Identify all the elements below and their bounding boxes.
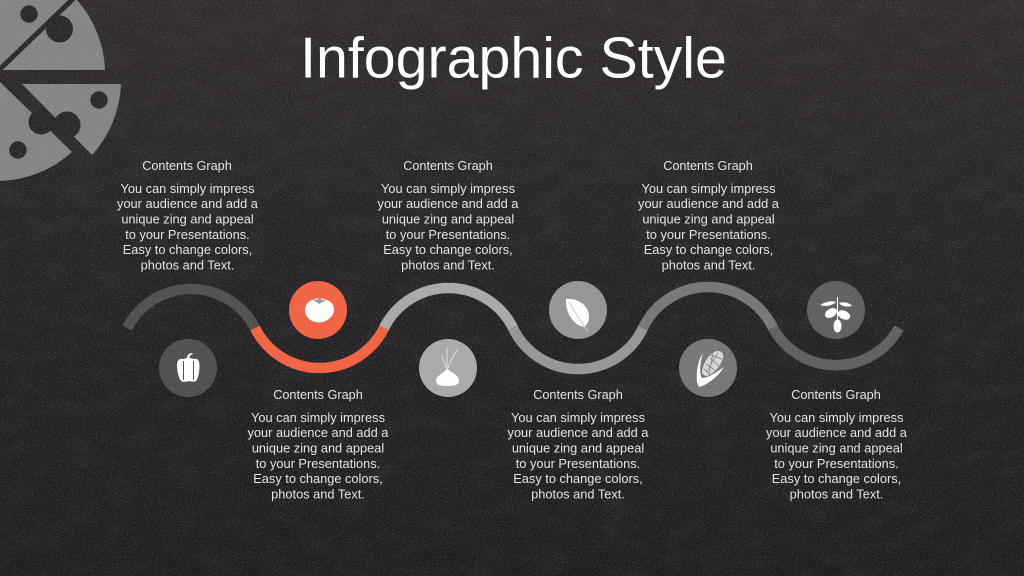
text block 6: Easy to change colors,	[772, 471, 901, 486]
text block 6: your audience and add a	[766, 425, 908, 440]
node: tomato	[289, 281, 347, 339]
text block 2: unique zing and appeal	[382, 212, 514, 226]
text block 4: photos and Text.	[271, 486, 365, 502]
node: pepper	[159, 339, 217, 397]
text block 5: photos and Text.	[531, 486, 625, 502]
text block 2: You can simply impress	[381, 181, 515, 196]
text block 1: to your Presentations.	[125, 227, 250, 242]
icon: corn	[697, 351, 724, 387]
text block 3	[638, 159, 780, 272]
node: olive	[807, 281, 865, 339]
icon: onion	[436, 347, 459, 386]
wave line	[127, 287, 899, 369]
text block 4	[248, 388, 389, 502]
text block 5: to your Presentations.	[516, 456, 640, 471]
text block 1: Contents Graph	[142, 159, 232, 173]
icon: pizza slices	[0, 0, 121, 181]
text block 1: your audience and add a	[117, 196, 259, 211]
text block 2: to your Presentations.	[386, 227, 510, 242]
text block 5	[508, 388, 649, 502]
text block 5: your audience and add a	[508, 425, 649, 440]
text block 2: Easy to change colors,	[383, 242, 513, 257]
text block 2: photos and Text.	[401, 258, 495, 272]
text block 4: your audience and add a	[248, 425, 389, 440]
title: Infographic Style	[300, 26, 727, 90]
text block 2: Contents Graph	[403, 159, 493, 173]
text block 3: Easy to change colors,	[644, 242, 773, 257]
text block 6: photos and Text.	[790, 486, 883, 502]
text block 2	[378, 159, 519, 272]
text block 6: unique zing and appeal	[770, 440, 903, 456]
text block 5: unique zing and appeal	[512, 440, 644, 456]
text block 6: Contents Graph	[791, 388, 881, 402]
text block 3: to your Presentations.	[646, 227, 771, 242]
text block 3: your audience and add a	[638, 196, 780, 211]
icon: pepper	[177, 353, 200, 382]
icon: olive branch	[820, 297, 852, 332]
text block 5: Easy to change colors,	[513, 471, 643, 486]
node: onion	[419, 339, 477, 397]
text block 6: to your Presentations.	[774, 456, 899, 471]
text block 1: Easy to change colors,	[123, 242, 252, 257]
text block 1: You can simply impress	[121, 181, 254, 196]
text block 3: unique zing and appeal	[642, 212, 775, 226]
text block 2: your audience and add a	[378, 196, 519, 211]
text block 5: Contents Graph	[533, 388, 623, 402]
text block 1: photos and Text.	[141, 258, 234, 272]
node: leaf	[549, 281, 607, 339]
text block 3: You can simply impress	[642, 181, 775, 196]
text block 4: You can simply impress	[251, 410, 385, 425]
node: corn	[679, 339, 737, 397]
text block 4: to your Presentations.	[256, 456, 380, 471]
text block 3: Contents Graph	[663, 159, 753, 173]
text block 1	[117, 159, 259, 272]
text block 4: Contents Graph	[273, 388, 363, 402]
text block 4: unique zing and appeal	[252, 440, 384, 456]
text block 5: You can simply impress	[511, 410, 645, 425]
text block 6: You can simply impress	[770, 410, 903, 425]
icon: leaf	[566, 299, 589, 332]
text block 3: photos and Text.	[662, 258, 755, 272]
icon: tomato	[305, 298, 334, 322]
text block 1: unique zing and appeal	[121, 212, 254, 226]
text block 4: Easy to change colors,	[253, 471, 383, 486]
text block 6	[766, 388, 908, 502]
